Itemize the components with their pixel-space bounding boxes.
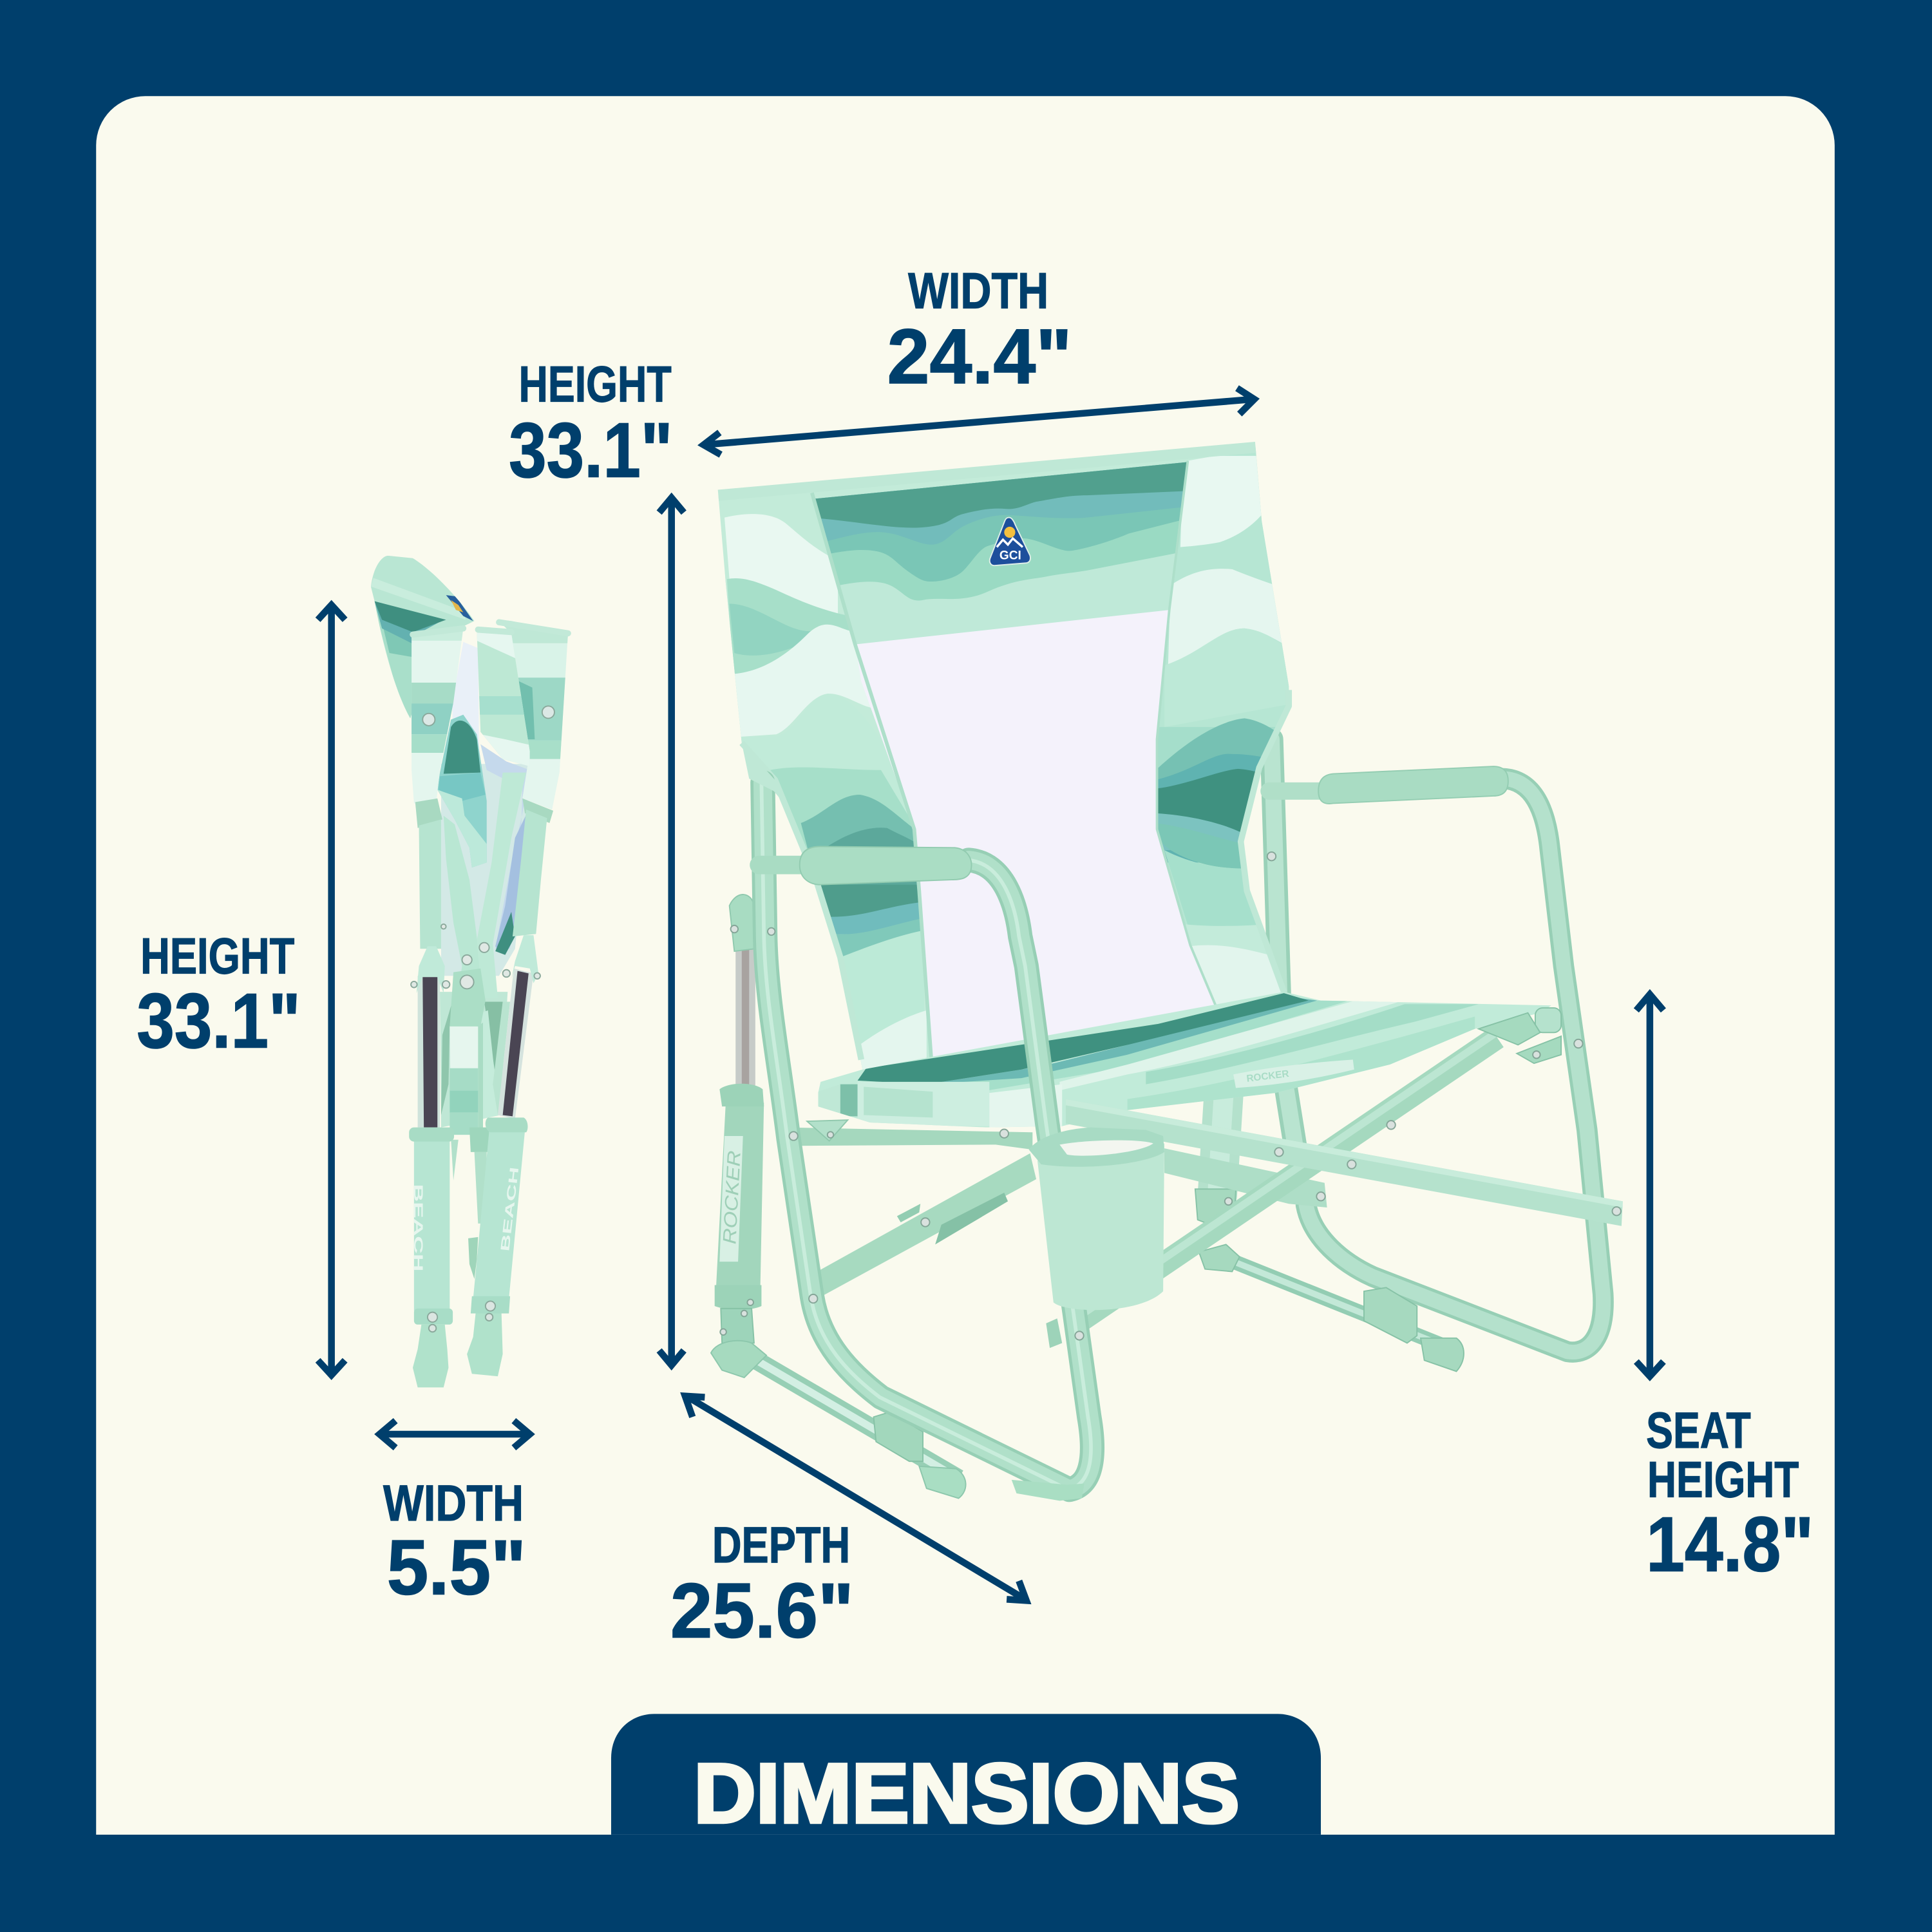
label: depth: DEPTH [712, 1517, 850, 1573]
label: seat height [1646, 1402, 1814, 1587]
folded chair [363, 548, 579, 1387]
label: folded chair width: 5.5" [387, 1524, 526, 1611]
arrow: open chair width [703, 388, 1255, 455]
label: open chair width [887, 262, 1072, 400]
open rocking chair [703, 444, 1623, 1501]
label: folded chair height [137, 927, 301, 1064]
arrow: folded chair width [379, 1421, 530, 1448]
label: seat height: 14.8" [1646, 1501, 1814, 1587]
folded mesh [452, 642, 479, 776]
folded lower sleeves [409, 1117, 527, 1325]
folded back wedge [371, 556, 474, 719]
foot pad near [1012, 1480, 1084, 1501]
right side waves [1158, 453, 1289, 1005]
brace clip [897, 1193, 1008, 1244]
folded lower backing [440, 992, 507, 1128]
seat bracket [1479, 1008, 1561, 1063]
far hinge and foot [1195, 1189, 1464, 1371]
rocker sleeve: ROCKER [719, 1150, 745, 1245]
frame bolts [720, 852, 1621, 1340]
left diagonal brace [819, 1153, 1036, 1296]
folded hems [413, 622, 568, 634]
folded fabric strap [450, 969, 486, 1135]
chair back fabric [703, 444, 1318, 1084]
near frame tube [759, 782, 1092, 1490]
folded strap tab [469, 1128, 489, 1152]
title: dimensions: DIMENSIONS [694, 1746, 1240, 1841]
label: open chair width: 24.4" [887, 313, 1072, 400]
chair seat fabric: ROCKER [1246, 1068, 1290, 1084]
side rail [1066, 1099, 1623, 1226]
top band waves [815, 462, 1186, 600]
folded lower cross braces [441, 998, 510, 1135]
folded inner flap [437, 715, 487, 867]
strut top clip [730, 895, 755, 951]
folded centre fabric [477, 632, 530, 766]
label: folded chair width: WIDTH [383, 1475, 524, 1531]
title tab [611, 1714, 1321, 1841]
white mesh panel [855, 610, 1216, 1059]
folded lower sleeves: BEACH [411, 1184, 424, 1271]
arrow: seat height [1636, 994, 1663, 1376]
label: open chair height: HEIGHT [518, 356, 672, 413]
cup holder [1029, 1128, 1164, 1310]
rear cross bar [1164, 1148, 1327, 1208]
folded centre bolts [411, 924, 540, 989]
under-seat bar bracket [807, 1120, 848, 1141]
icon: GCI logo badge: GCI [999, 549, 1021, 563]
far armrest [1318, 766, 1508, 804]
right diagonal brace [1071, 1034, 1497, 1327]
label: depth: 25.6" [670, 1567, 854, 1654]
arrow: depth [685, 1396, 1027, 1600]
label: folded chair width [383, 1475, 526, 1611]
folded far right fabric [504, 621, 568, 810]
label: seat height: HEIGHT [1647, 1452, 1799, 1508]
folded frame legs [419, 810, 547, 949]
folded left fabric [412, 631, 463, 804]
label: folded chair height: 33.1" [137, 977, 301, 1064]
folded lower sleeves: BEACH [498, 1166, 522, 1252]
folded strap hems [415, 799, 553, 828]
fabric corner over leg [742, 743, 786, 806]
folded right blue mesh [480, 744, 530, 955]
near runner and hinge [711, 1309, 966, 1499]
label: depth [670, 1517, 854, 1654]
label: open chair height: 33.1" [509, 406, 673, 493]
folded small hinge [468, 1237, 478, 1279]
folded cross bar B [477, 773, 526, 998]
chair seat fabric [801, 986, 1565, 1133]
folded cross bar A [444, 816, 486, 998]
folded strut caps [417, 935, 538, 993]
folded foot bolts [428, 1301, 495, 1332]
far-side frame [1217, 739, 1604, 1352]
label: open chair width: WIDTH [908, 262, 1048, 319]
rocker sleeve [715, 1084, 764, 1310]
near armrest [800, 846, 971, 885]
arrow: folded chair height [318, 605, 345, 1375]
folded back tube behind [451, 1140, 487, 1224]
front foot tab [1046, 1318, 1062, 1348]
label: seat height: SEAT [1646, 1402, 1751, 1459]
fabric hems [718, 448, 1289, 1062]
label: folded chair height: HEIGHT [140, 927, 294, 984]
under-seat bar [785, 1128, 1032, 1150]
folded fabric snaps [422, 706, 554, 726]
left side waves [724, 514, 927, 1069]
folded dark struts [418, 969, 533, 1128]
arrow: open chair height [659, 498, 684, 1365]
folded feet [413, 1314, 503, 1387]
folded centre backing [441, 764, 530, 976]
label: open chair height [509, 356, 673, 493]
icon: GCI logo badge [990, 518, 1030, 565]
stainless strut [735, 949, 755, 1090]
